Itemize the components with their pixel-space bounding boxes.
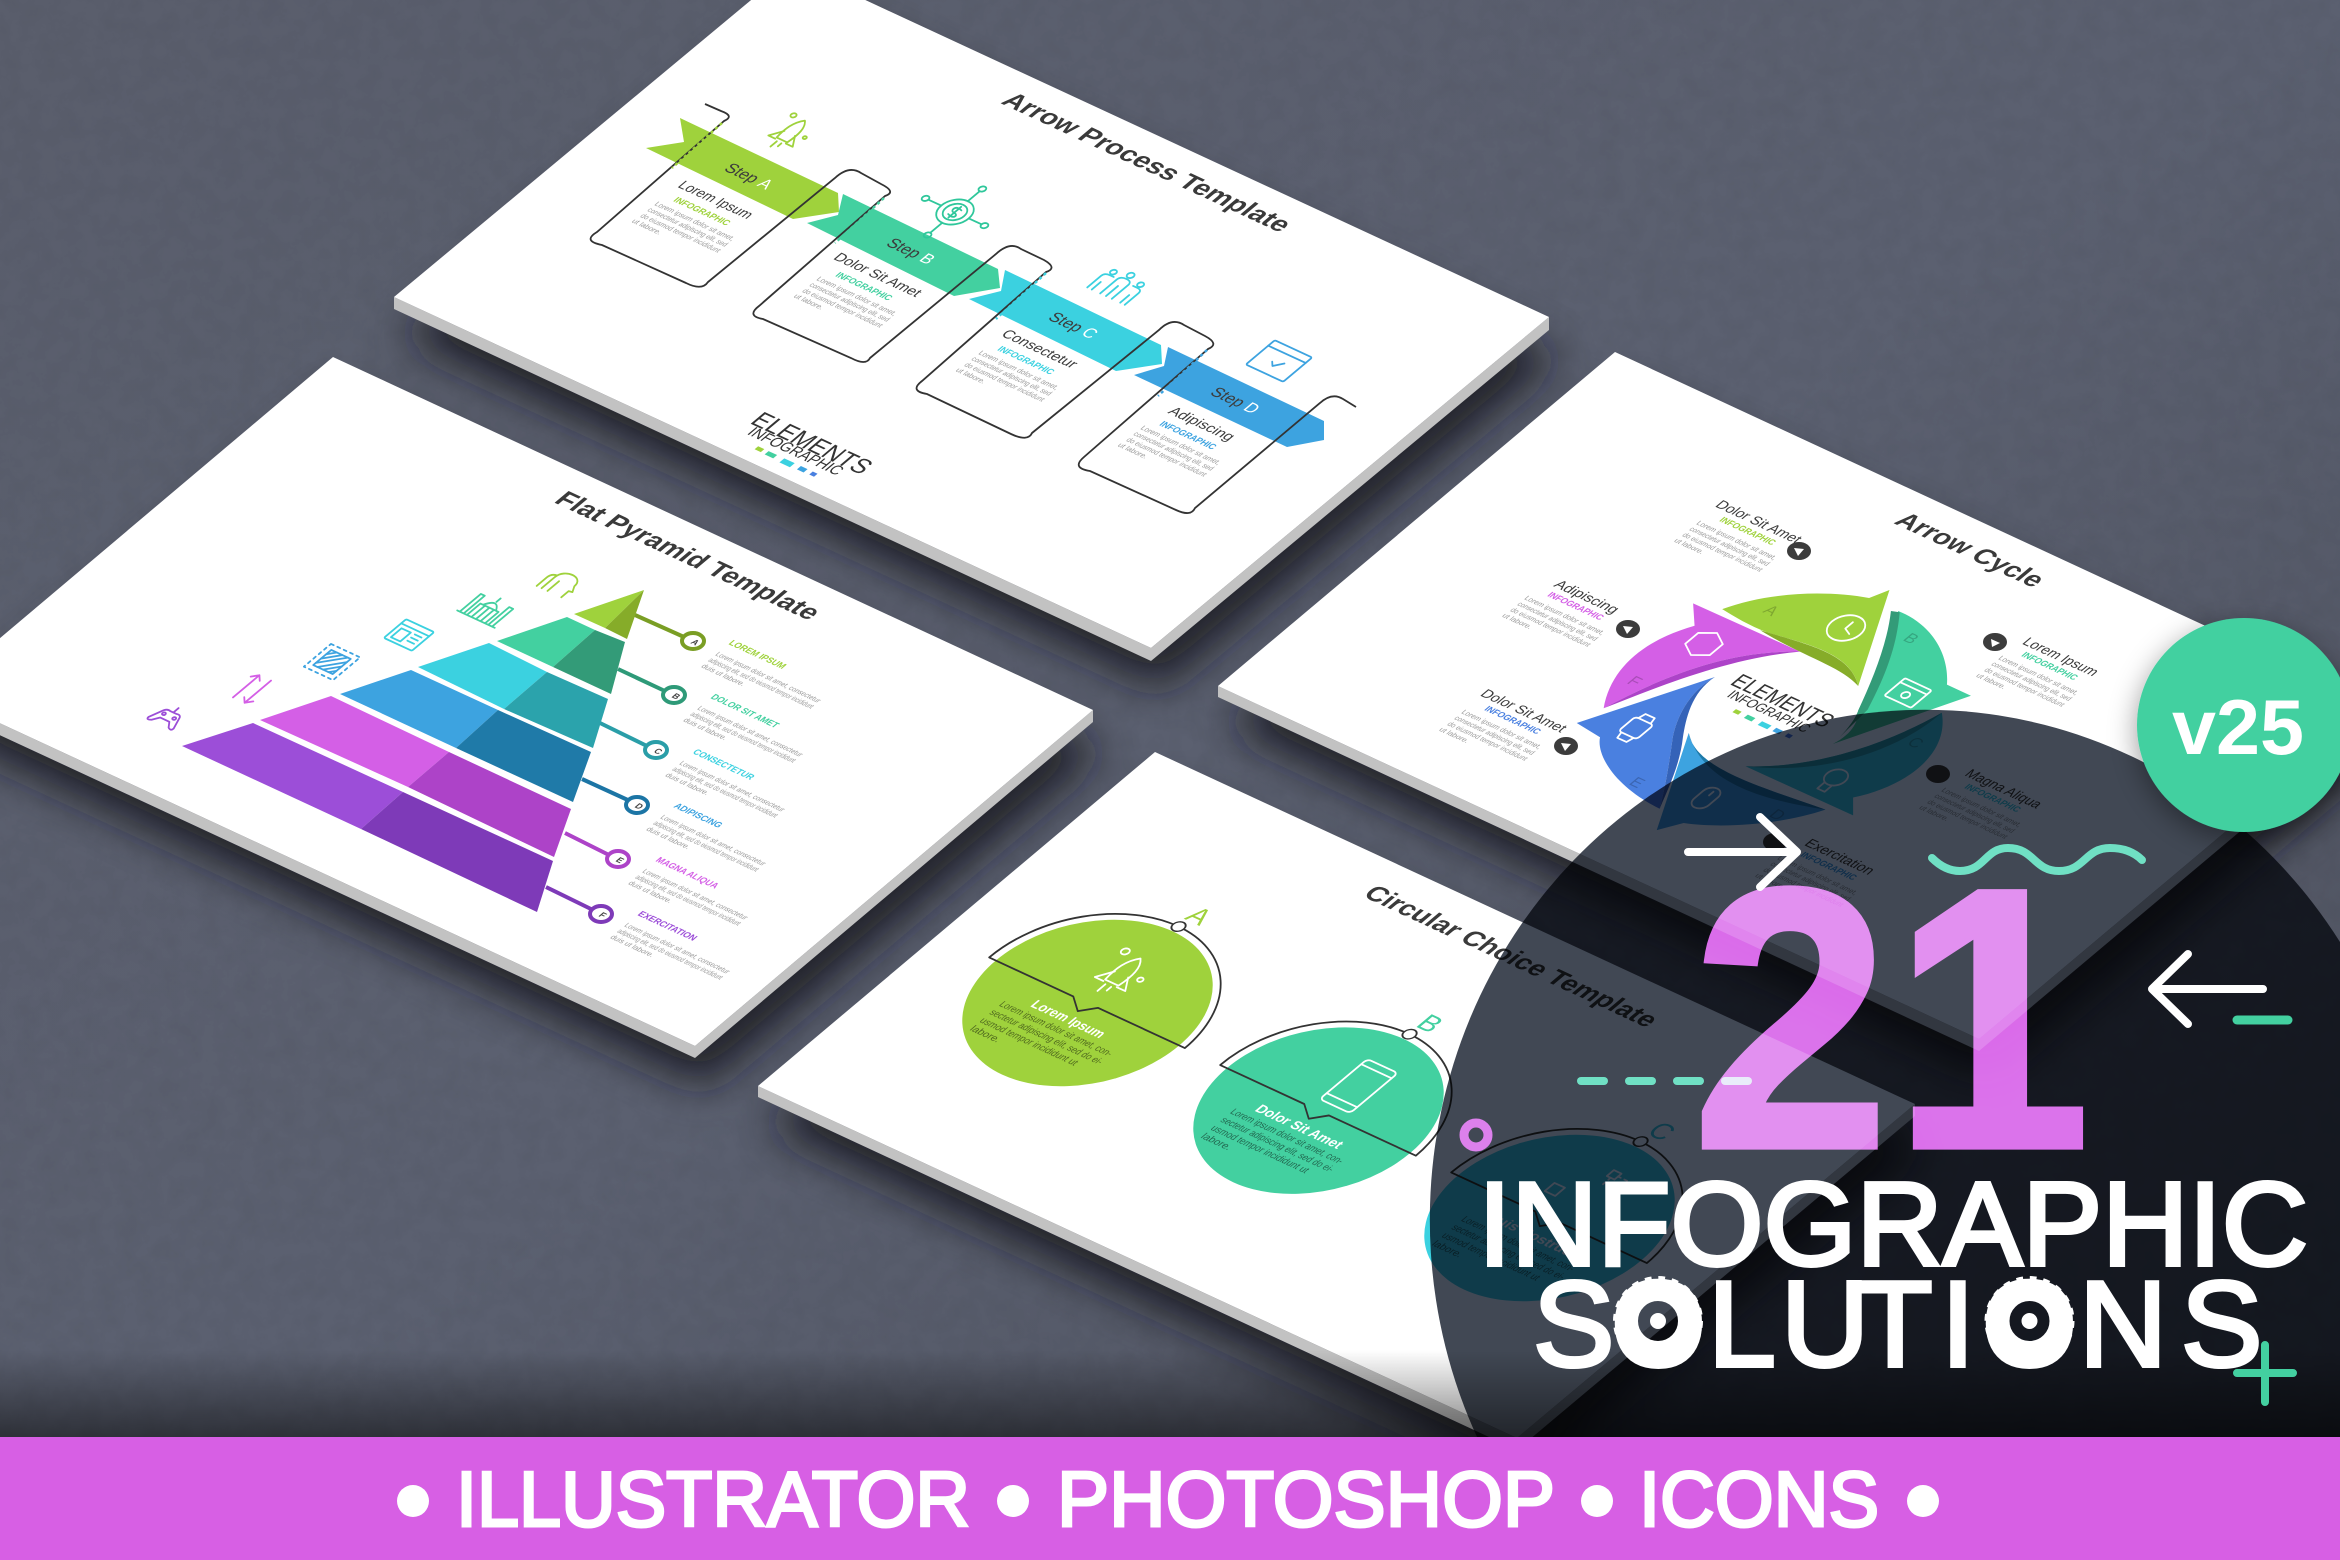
heading: Arrow Cycle bbox=[1888, 508, 2051, 592]
plus sign bbox=[2237, 1345, 2293, 1402]
text block Adipiscing: INFOGRAPHIC bbox=[1545, 590, 1606, 622]
card text D: do eiusmod tempor incididunt bbox=[1124, 436, 1210, 478]
text block Magna Aliqua: ut labore. bbox=[1917, 804, 1952, 823]
text block Lorem Ipsum: Lorem ipsum dolor sit amet, bbox=[1996, 654, 2081, 696]
text block E: adipiscing elit, sed do eiusmod tempor incididunt bbox=[633, 873, 744, 927]
arrow F bbox=[1604, 603, 1800, 708]
badge: v25: v25 bbox=[2172, 683, 2304, 771]
text block D: Lorem ipsum dolor sit amet, consectetur bbox=[658, 813, 769, 867]
bottom fade bbox=[0, 1350, 2340, 1440]
arrow A bbox=[1722, 590, 1889, 686]
ribbon step A bbox=[646, 118, 839, 219]
panel: flat pyramid template bbox=[0, 357, 1093, 1058]
arrow letters: D bbox=[1765, 806, 1790, 823]
text block Dolor Sit Amet green: consectetur adipiscing elit, sed bbox=[1687, 525, 1772, 567]
choice circle B: sectetur adipiscing elit, sed do ei- bbox=[1217, 1116, 1337, 1174]
text block Dolor Sit Amet green bbox=[1671, 498, 1805, 580]
slide face bbox=[394, 0, 1549, 648]
text block Dolor Sit Amet blue bbox=[1436, 687, 1570, 769]
text block Dolor Sit Amet blue: consectetur adipiscing elit, sed bbox=[1452, 714, 1537, 756]
pink ring bbox=[1464, 1123, 1488, 1147]
card text B: INFOGRAPHIC bbox=[833, 271, 895, 302]
pyramid level B bbox=[497, 617, 625, 694]
choice circle C: C bbox=[1641, 1117, 1683, 1146]
text block Magna Aliqua: INFOGRAPHIC bbox=[1962, 782, 2023, 814]
card text D: consectetur adipiscing elit, sed bbox=[1131, 430, 1216, 472]
ribbon step B bbox=[807, 194, 1000, 296]
card text C: do eiusmod tempor incididunt bbox=[962, 361, 1048, 403]
arrow C bbox=[1745, 713, 1943, 815]
step C label: Step C bbox=[1044, 309, 1103, 342]
slide edge bbox=[758, 1086, 1915, 1450]
icon: path nodes bbox=[1545, 1157, 1642, 1217]
logo: elements infographic: ELEMENTS bbox=[744, 408, 879, 479]
arrow letters: E bbox=[1625, 774, 1650, 791]
icon: phone bbox=[1320, 1059, 1398, 1113]
card text C: ut labore. bbox=[953, 366, 988, 385]
icon: browser eye bbox=[1884, 678, 1932, 708]
arrow left bbox=[2152, 954, 2263, 1024]
choice circle C: usmod tempor incididunt ut bbox=[1438, 1231, 1542, 1283]
icon: gear two bbox=[1988, 1280, 2070, 1362]
text block Dolor Sit Amet green: do eiusmod tempor incididunt bbox=[1680, 531, 1766, 574]
text block F: duis ut labore. bbox=[608, 933, 657, 959]
text block A: LOREM IPSUM bbox=[726, 639, 789, 671]
text block F: adipiscing elit, sed do eiusmod tempor incididunt bbox=[615, 927, 726, 981]
card text C: Lorem ipsum dolor sit amet, bbox=[976, 349, 1061, 391]
text block E: Lorem ipsum dolor sit amet, consectetur bbox=[640, 867, 751, 921]
badge F: F bbox=[596, 911, 610, 920]
heading: Flat Pyramid Template bbox=[548, 487, 827, 625]
icon: team bbox=[1087, 264, 1152, 305]
text block C: adipiscing elit, sed do eiusmod tempor incididunt bbox=[670, 765, 781, 819]
icon: game controller bbox=[147, 702, 191, 730]
choice circle C: labore. bbox=[1429, 1240, 1465, 1260]
card text B bbox=[788, 251, 926, 335]
dashed line bbox=[1581, 1077, 1748, 1085]
text block Magna Aliqua: Magna Aliqua bbox=[1961, 767, 2046, 811]
panel: circular choice template bbox=[758, 752, 1915, 1450]
pyramid level C bbox=[418, 643, 608, 748]
arrow letters: B bbox=[1899, 630, 1924, 647]
icon: smartwatch bbox=[1613, 712, 1659, 744]
icon: hexagon bbox=[1679, 627, 1729, 661]
choice circle C bbox=[1366, 1073, 1766, 1335]
big number 21 bbox=[1692, 811, 2090, 1226]
pyramid level A bbox=[574, 590, 644, 639]
text block B: adipiscing elit, sed do eiusmod tempor incididunt bbox=[688, 710, 799, 764]
heading: Arrow Process Template bbox=[995, 88, 1298, 237]
text block C: CONSECTETUR bbox=[690, 748, 757, 781]
card text B: Lorem ipsum dolor sit amet, bbox=[814, 275, 899, 317]
card text B: Dolor Sit Amet bbox=[829, 251, 925, 300]
cycle arrows bbox=[1577, 590, 1971, 830]
slide face bbox=[0, 357, 1093, 1046]
icon: head bbox=[537, 568, 586, 599]
text block Adipiscing bbox=[1500, 573, 1632, 655]
slide face bbox=[1218, 352, 2340, 1039]
text block Magna Aliqua: do eiusmod tempor incididunt bbox=[1925, 798, 2011, 841]
text block F: Lorem ipsum dolor sit amet, consectetur bbox=[622, 921, 733, 975]
choice circle B: B bbox=[1410, 1009, 1451, 1038]
text block Dolor Sit Amet blue: INFOGRAPHIC bbox=[1482, 704, 1543, 736]
big number 21: 1 bbox=[1893, 811, 2090, 1226]
text block E: duis ut labore. bbox=[626, 879, 675, 905]
icon: rocket bbox=[759, 113, 821, 154]
choice circle B: Lorem ipsum dolor sit amet, con- bbox=[1227, 1108, 1346, 1166]
icon: buildings bbox=[457, 590, 519, 628]
badge F bbox=[590, 906, 612, 922]
card text A: do eiusmod tempor incididunt bbox=[638, 212, 724, 254]
choice circle B: Dolor Sit Amet bbox=[1251, 1103, 1347, 1152]
connector lines bbox=[546, 615, 684, 910]
card text C: INFOGRAPHIC bbox=[995, 345, 1057, 376]
icon: browser check bbox=[1246, 340, 1312, 382]
card text A: consectetur adipiscing elit, sed bbox=[645, 206, 730, 248]
text block Lorem Ipsum bbox=[1974, 633, 2106, 715]
text block Magna Aliqua bbox=[1917, 765, 2049, 847]
text block Dolor Sit Amet green: INFOGRAPHIC bbox=[1717, 515, 1778, 547]
card text A: ut labore. bbox=[629, 217, 664, 236]
icon: dollar network bbox=[893, 172, 1017, 252]
text block Dolor Sit Amet blue: do eiusmod tempor incididunt bbox=[1445, 720, 1531, 763]
arrow E bbox=[1577, 677, 1715, 809]
choice circle A: Lorem ipsum dolor sit amet, con- bbox=[996, 1000, 1115, 1059]
step D label: Step D bbox=[1206, 384, 1265, 417]
card text C: consectetur adipiscing elit, sed bbox=[969, 355, 1054, 397]
slide face bbox=[758, 752, 1915, 1438]
text block Exercitation: Exercitation bbox=[1800, 837, 1878, 878]
banner text: PHOTOSHOP bbox=[1057, 1455, 1555, 1543]
pyramid level E bbox=[260, 696, 571, 857]
text block A: duis ut labore. bbox=[699, 662, 748, 688]
icon: rocket white bbox=[1082, 947, 1162, 1001]
banner text bbox=[456, 1455, 1879, 1543]
big number 21: 2 bbox=[1692, 811, 1889, 1226]
banner text: ICONS bbox=[1639, 1455, 1879, 1543]
badge B: B bbox=[669, 692, 683, 701]
icon: exchange arrows bbox=[228, 673, 276, 705]
text block B: DOLOR SIT AMET bbox=[708, 693, 782, 730]
choice circle A: Lorem Ipsum bbox=[1026, 998, 1109, 1041]
badge A bbox=[682, 633, 704, 649]
slide edge bbox=[0, 693, 1093, 1058]
logo: elements infographic centre: ELEMENTS bbox=[1725, 670, 1841, 731]
card text B: consectetur adipiscing elit, sed bbox=[807, 281, 892, 323]
card text D: INFOGRAPHIC bbox=[1157, 420, 1219, 451]
text block Dolor Sit Amet green: Lorem ipsum dolor sit amet, bbox=[1694, 519, 1779, 561]
text block Magna Aliqua: consectetur adipiscing elit, sed bbox=[1932, 792, 2017, 834]
card text B: ut labore. bbox=[791, 292, 826, 311]
badge E: E bbox=[613, 856, 627, 865]
text block D: ADIPISCING bbox=[671, 802, 725, 829]
panel: arrow process template bbox=[394, 0, 1549, 661]
pyramid level D bbox=[340, 670, 591, 802]
card text A: Lorem ipsum dolor sit amet, bbox=[652, 200, 737, 242]
text block Lorem Ipsum: INFOGRAPHIC bbox=[2019, 650, 2080, 682]
text block Adipiscing: consectetur adipiscing elit, sed bbox=[1515, 600, 1600, 642]
choice circle C: sectetur adipiscing elit, sed do ei- bbox=[1448, 1223, 1568, 1282]
text block C: duis ut labore. bbox=[663, 771, 712, 797]
step B label: Step B bbox=[882, 235, 940, 268]
choice circle A: labore. bbox=[967, 1025, 1003, 1045]
badge C bbox=[645, 742, 667, 758]
bottom banner bbox=[0, 1437, 2340, 1560]
choice circle C: Lorem ipsum dolor sit amet, con- bbox=[1458, 1215, 1577, 1274]
card text C: Consectetur bbox=[997, 327, 1081, 371]
choice circle A: usmod tempor incididunt ut bbox=[976, 1016, 1080, 1068]
banner text: ILLUSTRATOR bbox=[456, 1455, 970, 1543]
dark circle overlay bbox=[1430, 710, 2340, 1437]
arrow letters bbox=[1623, 602, 1928, 823]
text block A: Lorem ipsum dolor sit amet, consectetur bbox=[713, 650, 824, 704]
text block Exercitation: do eiusmod tempor incididunt bbox=[1761, 866, 1847, 909]
choice circle A: sectetur adipiscing elit, sed do ei- bbox=[986, 1008, 1106, 1067]
wave bbox=[1932, 848, 2142, 871]
card text C bbox=[953, 327, 1088, 409]
heading: Circular Choice Template bbox=[1357, 881, 1665, 1032]
text block Dolor Sit Amet green: ut labore. bbox=[1672, 537, 1707, 556]
card text A: INFOGRAPHIC bbox=[671, 196, 733, 227]
text block Adipiscing: do eiusmod tempor incididunt bbox=[1508, 606, 1594, 649]
text block Dolor Sit Amet blue: Dolor Sit Amet bbox=[1476, 687, 1570, 736]
arrow D bbox=[1657, 733, 1825, 830]
logo: elements infographic: INFOGRAPHIC bbox=[743, 425, 847, 478]
headline: infographic: INFOGRAPHIC bbox=[1478, 1158, 2308, 1291]
text block D: duis ut labore. bbox=[644, 825, 693, 851]
text block Dolor Sit Amet green: Dolor Sit Amet bbox=[1711, 498, 1805, 547]
choice circle B: usmod tempor incididunt ut bbox=[1207, 1124, 1311, 1175]
dotted overlaps on ribbons bbox=[672, 123, 1207, 396]
choice circle B: labore. bbox=[1198, 1132, 1234, 1152]
text block Lorem Ipsum: consectetur adipiscing elit, sed bbox=[1989, 660, 2074, 702]
serpentine card outline bbox=[591, 104, 1356, 513]
text block Lorem Ipsum: do eiusmod tempor incididunt bbox=[1982, 666, 2068, 709]
panel: arrow cycle bbox=[1218, 352, 2340, 1051]
badge C: C bbox=[651, 747, 665, 756]
text block E: MAGNA ALIQUA bbox=[653, 856, 721, 890]
text block D: adipiscing elit, sed do eiusmod tempor incididunt bbox=[651, 819, 762, 873]
card text D bbox=[1115, 402, 1250, 484]
icon: gear one bbox=[1617, 1280, 1699, 1362]
text block Dolor Sit Amet blue: Lorem ipsum dolor sit amet, bbox=[1459, 708, 1544, 750]
ribbon step D bbox=[1134, 347, 1324, 447]
text block Exercitation: INFOGRAPHIC bbox=[1798, 850, 1859, 882]
text block A: adipiscing elit, sed do eiusmod tempor incididunt bbox=[706, 656, 817, 710]
arrow right bbox=[1688, 817, 1797, 887]
text block C: Lorem ipsum dolor sit amet, consectetur bbox=[677, 759, 788, 813]
text block Adipiscing: ut labore. bbox=[1500, 612, 1535, 631]
text block Lorem Ipsum: Lorem Ipsum bbox=[2018, 635, 2102, 679]
choice circle A: A bbox=[1179, 902, 1220, 930]
icon: browser layout bbox=[384, 619, 434, 651]
choice circle B bbox=[1135, 965, 1535, 1227]
text block Magna Aliqua: Lorem ipsum dolor sit amet, bbox=[1939, 786, 2024, 828]
slide edge bbox=[1218, 686, 2340, 1051]
arrow letters: C bbox=[1903, 734, 1928, 751]
icon: hatched chip bbox=[304, 644, 360, 680]
slide edge bbox=[394, 297, 1549, 661]
card text A bbox=[629, 178, 764, 260]
ribbon step C bbox=[969, 270, 1162, 371]
text block Exercitation: ut labore. bbox=[1753, 872, 1788, 891]
choice circle A bbox=[904, 858, 1304, 1120]
choice circle C: Quis Nostrud bbox=[1482, 1210, 1578, 1259]
text block F: EXERCITATION bbox=[635, 910, 700, 942]
badge: v25 bbox=[2137, 618, 2340, 832]
text block Lorem Ipsum: ut labore. bbox=[1974, 672, 2009, 691]
pyramid level F bbox=[182, 723, 553, 912]
badge E bbox=[607, 851, 629, 867]
card text D: Lorem ipsum dolor sit amet, bbox=[1138, 424, 1223, 466]
icon: clock bbox=[1819, 610, 1873, 646]
text block B: duis ut labore. bbox=[681, 716, 730, 742]
logo: elements infographic centre: INFOGRAPHIC bbox=[1723, 688, 1814, 735]
icon: mouse bbox=[1687, 785, 1725, 811]
badge A: A bbox=[688, 638, 702, 647]
card text B: do eiusmod tempor incididunt bbox=[800, 287, 886, 329]
icon: light bulb bbox=[1812, 766, 1853, 794]
arrow B bbox=[1833, 611, 1971, 744]
green dash bbox=[2237, 1016, 2288, 1024]
text block Exercitation: Lorem ipsum dolor sit amet, bbox=[1775, 854, 1860, 896]
badge D: D bbox=[632, 802, 646, 811]
text block Exercitation: consectetur adipiscing elit, sed bbox=[1768, 860, 1853, 902]
card text D: Adipiscing bbox=[1164, 405, 1239, 444]
card text A: Lorem Ipsum bbox=[674, 179, 757, 222]
text block Exercitation bbox=[1753, 833, 1885, 915]
arrow letters: A bbox=[1759, 602, 1784, 619]
badge D bbox=[626, 797, 648, 813]
round markers bbox=[1554, 542, 2007, 851]
text block Adipiscing: Lorem ipsum dolor sit amet, bbox=[1522, 594, 1607, 636]
arrow letters: F bbox=[1623, 673, 1647, 690]
card text D: ut labore. bbox=[1115, 441, 1150, 460]
text block Adipiscing: Adipiscing bbox=[1550, 578, 1623, 617]
text block Dolor Sit Amet blue: ut labore. bbox=[1437, 726, 1472, 745]
text block B: Lorem ipsum dolor sit amet, consectetur bbox=[695, 704, 806, 758]
banner dots bbox=[397, 1485, 1939, 1517]
headline: solutions with gears: SOLUTIONS bbox=[1533, 1256, 2262, 1392]
step A label: Step A bbox=[720, 160, 778, 193]
badge B bbox=[663, 687, 685, 703]
